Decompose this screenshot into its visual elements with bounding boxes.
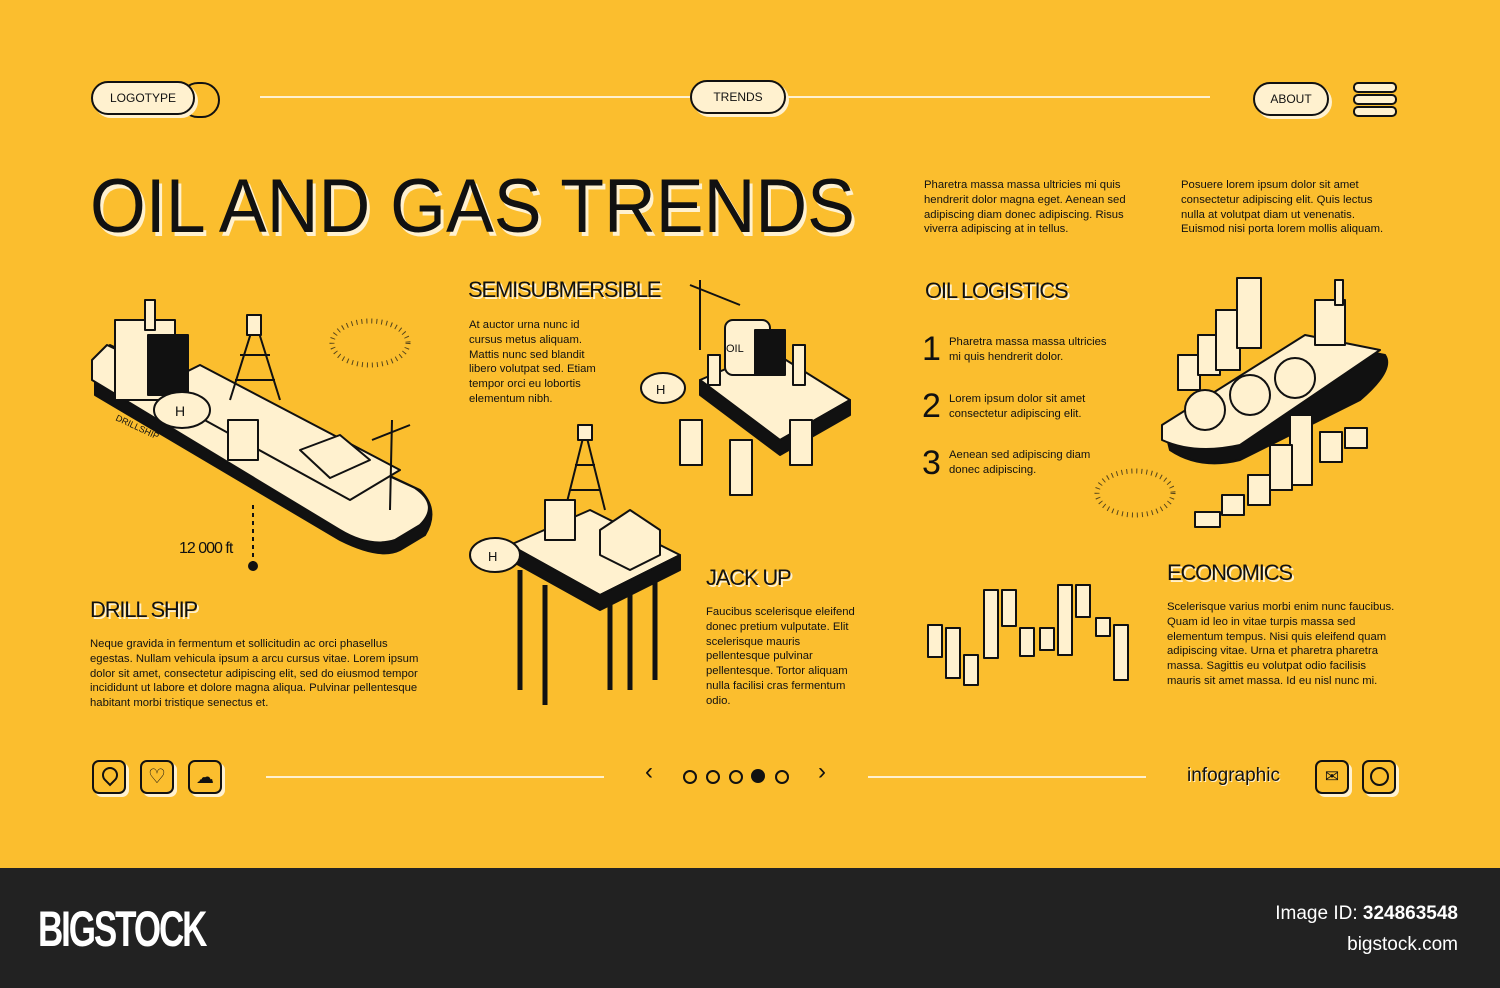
jack up	[470, 425, 680, 705]
semisubmersible: H	[656, 382, 665, 397]
logotype second ring	[180, 82, 220, 118]
footer logo: BIGSTOCK	[38, 901, 205, 957]
lng ship and bars	[1162, 278, 1387, 527]
icon: mail	[1315, 760, 1349, 794]
dots pattern	[332, 321, 1173, 515]
bottom nav	[92, 758, 1399, 797]
icon: cloud: ☁	[196, 767, 214, 787]
icon: heart	[140, 760, 174, 794]
heading: oil logistics: OIL LOGISTICS	[925, 278, 1068, 303]
pagination: ‹	[645, 758, 653, 785]
text: jack up: Faucibus scelerisque eleifend donec pretium vulputate. Elit scelerisque mauris pellentesque pulvinar pellentesque. Tortor aliquam nulla facilisi cras fermentum odio.	[706, 606, 855, 707]
heading: economics: ECONOMICS	[1167, 560, 1292, 585]
heading: drill ship: DRILL SHIP	[90, 597, 197, 622]
icon: mail: ✉	[1325, 767, 1339, 786]
about pill	[1253, 82, 1329, 116]
line left	[266, 776, 604, 778]
icon: chat	[1362, 760, 1396, 794]
about pill: ABOUT	[1270, 92, 1312, 106]
logotype pill: LOGOTYPE	[110, 91, 176, 105]
list: logistics	[922, 330, 1107, 482]
footer id: bigstock.com	[1347, 934, 1458, 955]
line right	[868, 776, 1146, 778]
top nav	[91, 80, 1397, 119]
list: logistics: 1	[922, 330, 939, 368]
drill ship: H	[175, 403, 185, 419]
list: logistics: Lorem ipsum dolor sit amet consectetur adipiscing elit.	[949, 393, 1085, 420]
icon: heart: ♡	[148, 766, 166, 788]
text: drill ship: Neque gravida in fermentum et sollicitudin ac orci phasellus egestas. Nullam vehicula ipsum a arcu cursus vitae. Lorem ipsum dolor sit amet, consectetur adipiscing elit, sed do eiusmod tempor incididunt ut labore et dolore magna aliqua. Pulvinar pellentesque habitant morbi tristique senectus et.	[90, 638, 418, 709]
heading: semisubmersible: SEMISUBMERSIBLE	[468, 277, 660, 302]
pagination: ›	[818, 758, 826, 785]
nav line	[260, 96, 1210, 98]
trends pill	[690, 80, 786, 114]
text: semisubmersible: At auctor urna nunc id cursus metus aliquam. Mattis nunc sed blandit libero volutpat sed. Etiam tempor orci eu lobortis elementum nibh.	[469, 319, 596, 405]
list: logistics: Aenean sed adipiscing diam donec adipiscing.	[949, 449, 1090, 476]
semisubmersible: OIL	[726, 343, 744, 355]
list: logistics: 2	[922, 387, 941, 425]
drill ship: DRILLSHIP	[114, 413, 161, 441]
text: economics: Scelerisque varius morbi enim nunc faucibus. Quam id leo in vitae turpis massa sed elementum tempus. Nisi quis eleifend quam adipiscing vitae. Urna et pharetra pharetra massa. Sagittis eu volutpat odio facilisis mauris sit amet massa. Id eu nisl nunc mi.	[1167, 601, 1394, 687]
icon: location	[92, 760, 126, 794]
footer id	[1275, 903, 1458, 955]
intro text 2: Posuere lorem ipsum dolor sit amet consectetur adipiscing elit. Quis lectus nulla at volutpat diam ut venenatis. Euismod nisi porta lorem mollis aliquam.	[1181, 179, 1383, 235]
logotype pill	[91, 81, 195, 115]
footer id: Image ID: 324863548	[1275, 903, 1458, 924]
drill ship	[92, 300, 431, 570]
trends pill: TRENDS	[713, 90, 763, 104]
icon: menu	[1353, 82, 1397, 117]
footer bar	[0, 868, 1500, 988]
list: logistics: Pharetra massa massa ultricies mi quis hendrerit dolor.	[949, 336, 1107, 363]
pagination	[645, 758, 826, 785]
label: infographic: infographic	[1187, 765, 1280, 786]
label: depth: 12 000 ft	[179, 540, 232, 557]
icon: cloud	[188, 760, 222, 794]
semisubmersible	[641, 280, 850, 495]
intro text 1: Pharetra massa massa ultricies mi quis hendrerit dolor magna eget. Aenean sed adipiscing diam donec adipiscing. Risus viverra adipiscing at in tellus.	[924, 179, 1126, 235]
candlestick chart	[928, 585, 1128, 685]
jack up: H	[488, 549, 497, 564]
heading: jack up: JACK UP	[706, 565, 791, 590]
list: logistics: 3	[922, 444, 941, 482]
